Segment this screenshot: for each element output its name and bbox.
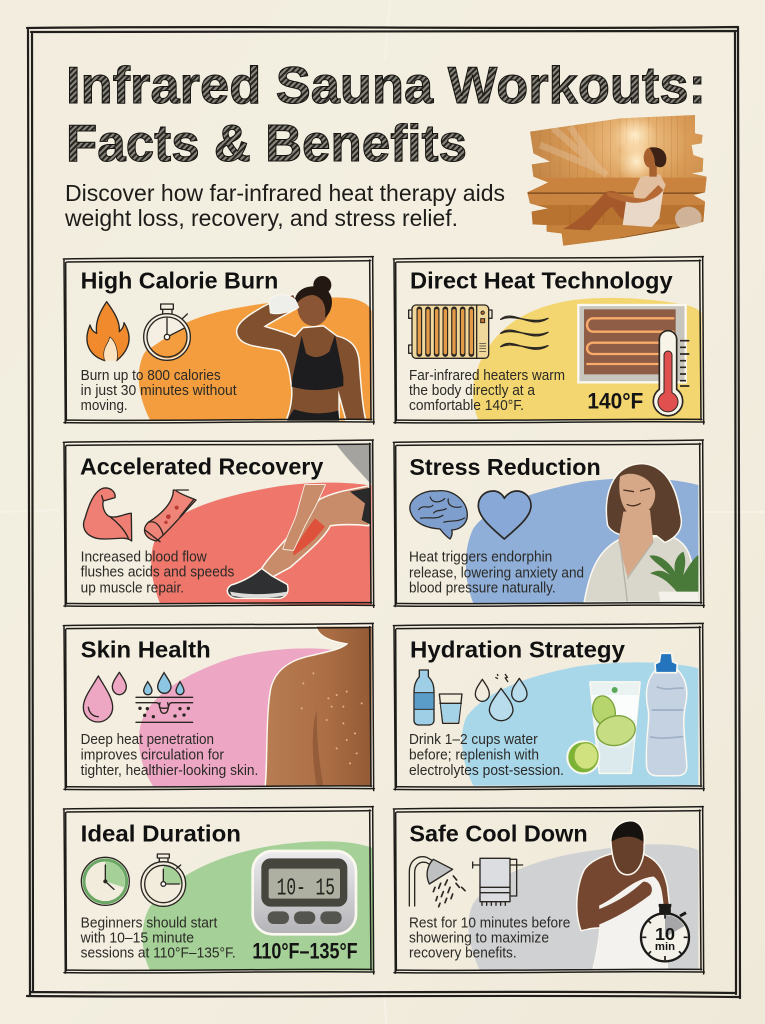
heading: High Calorie Burn (81, 267, 278, 293)
colour blob (151, 483, 372, 605)
panel: hydration strategy (393, 623, 704, 791)
icon: 10 minute timer (641, 905, 689, 961)
hero woman (563, 147, 666, 230)
photo: digital timer (253, 851, 356, 934)
body text: sessions at 110°F–135°F. (81, 946, 236, 962)
body text: Far-infrared heaters warm (409, 368, 565, 384)
icon: 10 minute timer: min (655, 941, 675, 953)
icon: three water drops (475, 674, 527, 721)
body text: Drink 1–2 cups water (409, 732, 538, 748)
photo: infrared panel (578, 305, 686, 382)
photo: man with towel (578, 822, 669, 968)
panel: skin health (63, 623, 374, 791)
panel: stress reduction (393, 440, 704, 607)
icon: flame (87, 302, 129, 361)
colour blob (462, 662, 698, 786)
body text: comfortable 140°F. (409, 398, 524, 414)
big temperature: 140°F (587, 389, 643, 414)
panel: safe cool down (393, 807, 704, 974)
icon: shower (409, 857, 465, 907)
panel: accelerated recovery (63, 440, 374, 607)
body text: recovery benefits. (409, 946, 517, 962)
body text: Heat triggers endorphin (409, 550, 552, 566)
body text: with 10–15 minute (80, 931, 194, 947)
icon: pink drops (83, 672, 126, 722)
body text (81, 550, 234, 596)
colour blob (466, 478, 698, 603)
heading: Skin Health (81, 637, 211, 663)
body text: improves circulation for (81, 747, 224, 763)
subtitle: weight loss, recovery, and stress relief. (64, 205, 458, 231)
body text: showering to maximize (409, 931, 549, 947)
title (66, 57, 706, 173)
title: Facts & Benefits (66, 115, 467, 173)
icon: brain (410, 491, 467, 539)
icon: blood vessel (145, 490, 196, 542)
subtitle (64, 180, 505, 231)
body text: in just 30 minutes without (81, 383, 237, 399)
icon: skin pore with droplets (136, 673, 193, 722)
panel: direct heat technology (393, 257, 704, 424)
panel: ideal duration (63, 807, 374, 974)
heading: Accelerated Recovery (80, 453, 324, 479)
photo: leg with glowing calf (228, 445, 372, 598)
body text: the body directly at a (409, 383, 535, 399)
icon: stopwatch (144, 304, 190, 360)
body text: moving. (81, 398, 128, 414)
body text: tighter, healthier-looking skin. (81, 763, 258, 779)
icon: stopwatch (141, 854, 186, 906)
icon: flexed arm (84, 488, 132, 541)
body text: release, lowering anxiety and (409, 565, 584, 581)
body text: flushes acids and speeds (81, 565, 234, 581)
body text (409, 732, 564, 779)
colour blob (139, 297, 372, 421)
body text (80, 916, 236, 962)
panel: high calorie burn (63, 257, 374, 424)
temperature range: 110°F–135°F (252, 938, 358, 963)
heading: Stress Reduction (409, 454, 601, 480)
body text: up muscle repair. (81, 580, 184, 596)
body text (81, 368, 237, 414)
heading: Safe Cool Down (409, 821, 588, 847)
heading: Direct Heat Technology (410, 267, 673, 293)
body text: Rest for 10 minutes before (409, 915, 570, 931)
body text: Increased blood flow (81, 550, 207, 566)
photo: glass of water with lime (567, 683, 639, 773)
icon: heat waves (501, 316, 548, 349)
body text: Burn up to 800 calories (81, 368, 221, 384)
body text: Deep heat penetration (81, 732, 214, 748)
icon: towel on rail (473, 858, 523, 905)
body text: electrolytes post-session. (409, 763, 564, 779)
icon: heart (478, 491, 531, 539)
body text: before; replenish with (409, 747, 539, 763)
photo: sports bottle (647, 653, 686, 775)
hero image: woman relaxing in sauna (527, 115, 707, 246)
body text: blood pressure naturally. (409, 581, 556, 597)
body text (409, 550, 584, 597)
colour blob (142, 841, 373, 971)
heading: Hydration Strategy (410, 636, 625, 662)
photo: relaxed woman (585, 464, 698, 603)
body text (409, 915, 570, 962)
title: Infrared Sauna Workouts: (66, 57, 706, 115)
photo: athlete wiping forehead (237, 276, 365, 421)
icon: thermometer (653, 331, 689, 416)
colour blob (473, 298, 702, 421)
colour blob (139, 648, 372, 787)
body text (81, 732, 258, 779)
icon: wall clock (81, 857, 129, 905)
subtitle: Discover how far-infrared heat therapy aids (65, 180, 505, 206)
photo: shoulder with sweat droplets (266, 627, 372, 786)
body text: Beginners should start (81, 916, 217, 932)
heading: Ideal Duration (81, 821, 241, 847)
icon: 10 minute timer: 10 (655, 924, 675, 944)
body text (409, 368, 565, 414)
icon: water bottle and cup (414, 670, 462, 725)
icon: wall heater (409, 305, 492, 358)
colour blob (468, 844, 698, 971)
photo: digital timer: 10- 15 (277, 876, 335, 903)
